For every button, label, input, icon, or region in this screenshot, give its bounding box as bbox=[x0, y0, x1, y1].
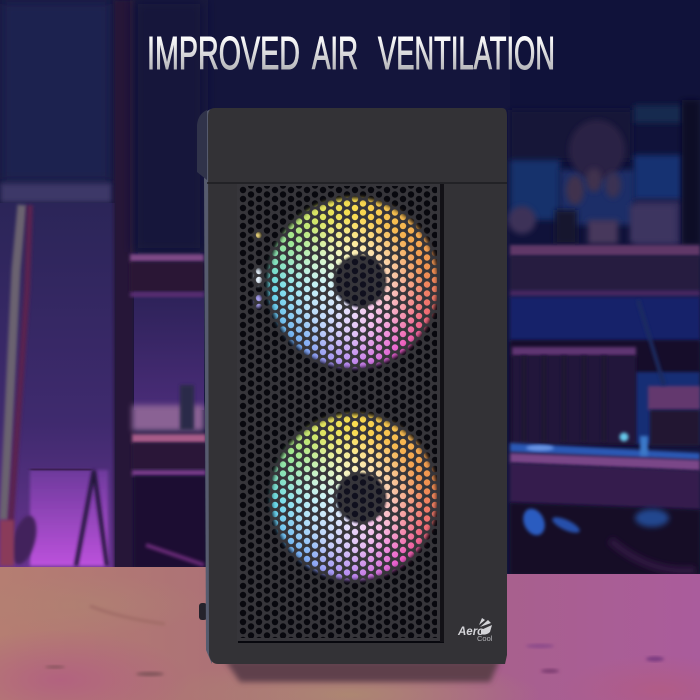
fan 2 hub bbox=[336, 473, 386, 523]
fan 2 white highlight bbox=[272, 428, 428, 584]
fan 1 white highlight bbox=[270, 212, 430, 372]
fan 1 side light spots bbox=[252, 231, 264, 310]
title: AIR bbox=[312, 27, 358, 79]
fan 1 glow bbox=[268, 198, 438, 368]
fan 1 hub bbox=[334, 255, 386, 307]
title: IMPROVED bbox=[147, 27, 300, 79]
logo: AeroCool: Aero bbox=[457, 626, 484, 638]
title: VENTILATION bbox=[378, 27, 555, 79]
logo: AeroCool: Cool bbox=[477, 634, 493, 643]
fan 2 glow bbox=[271, 414, 437, 580]
power button bbox=[199, 603, 207, 620]
perforated mesh front panel bbox=[207, 182, 507, 642]
